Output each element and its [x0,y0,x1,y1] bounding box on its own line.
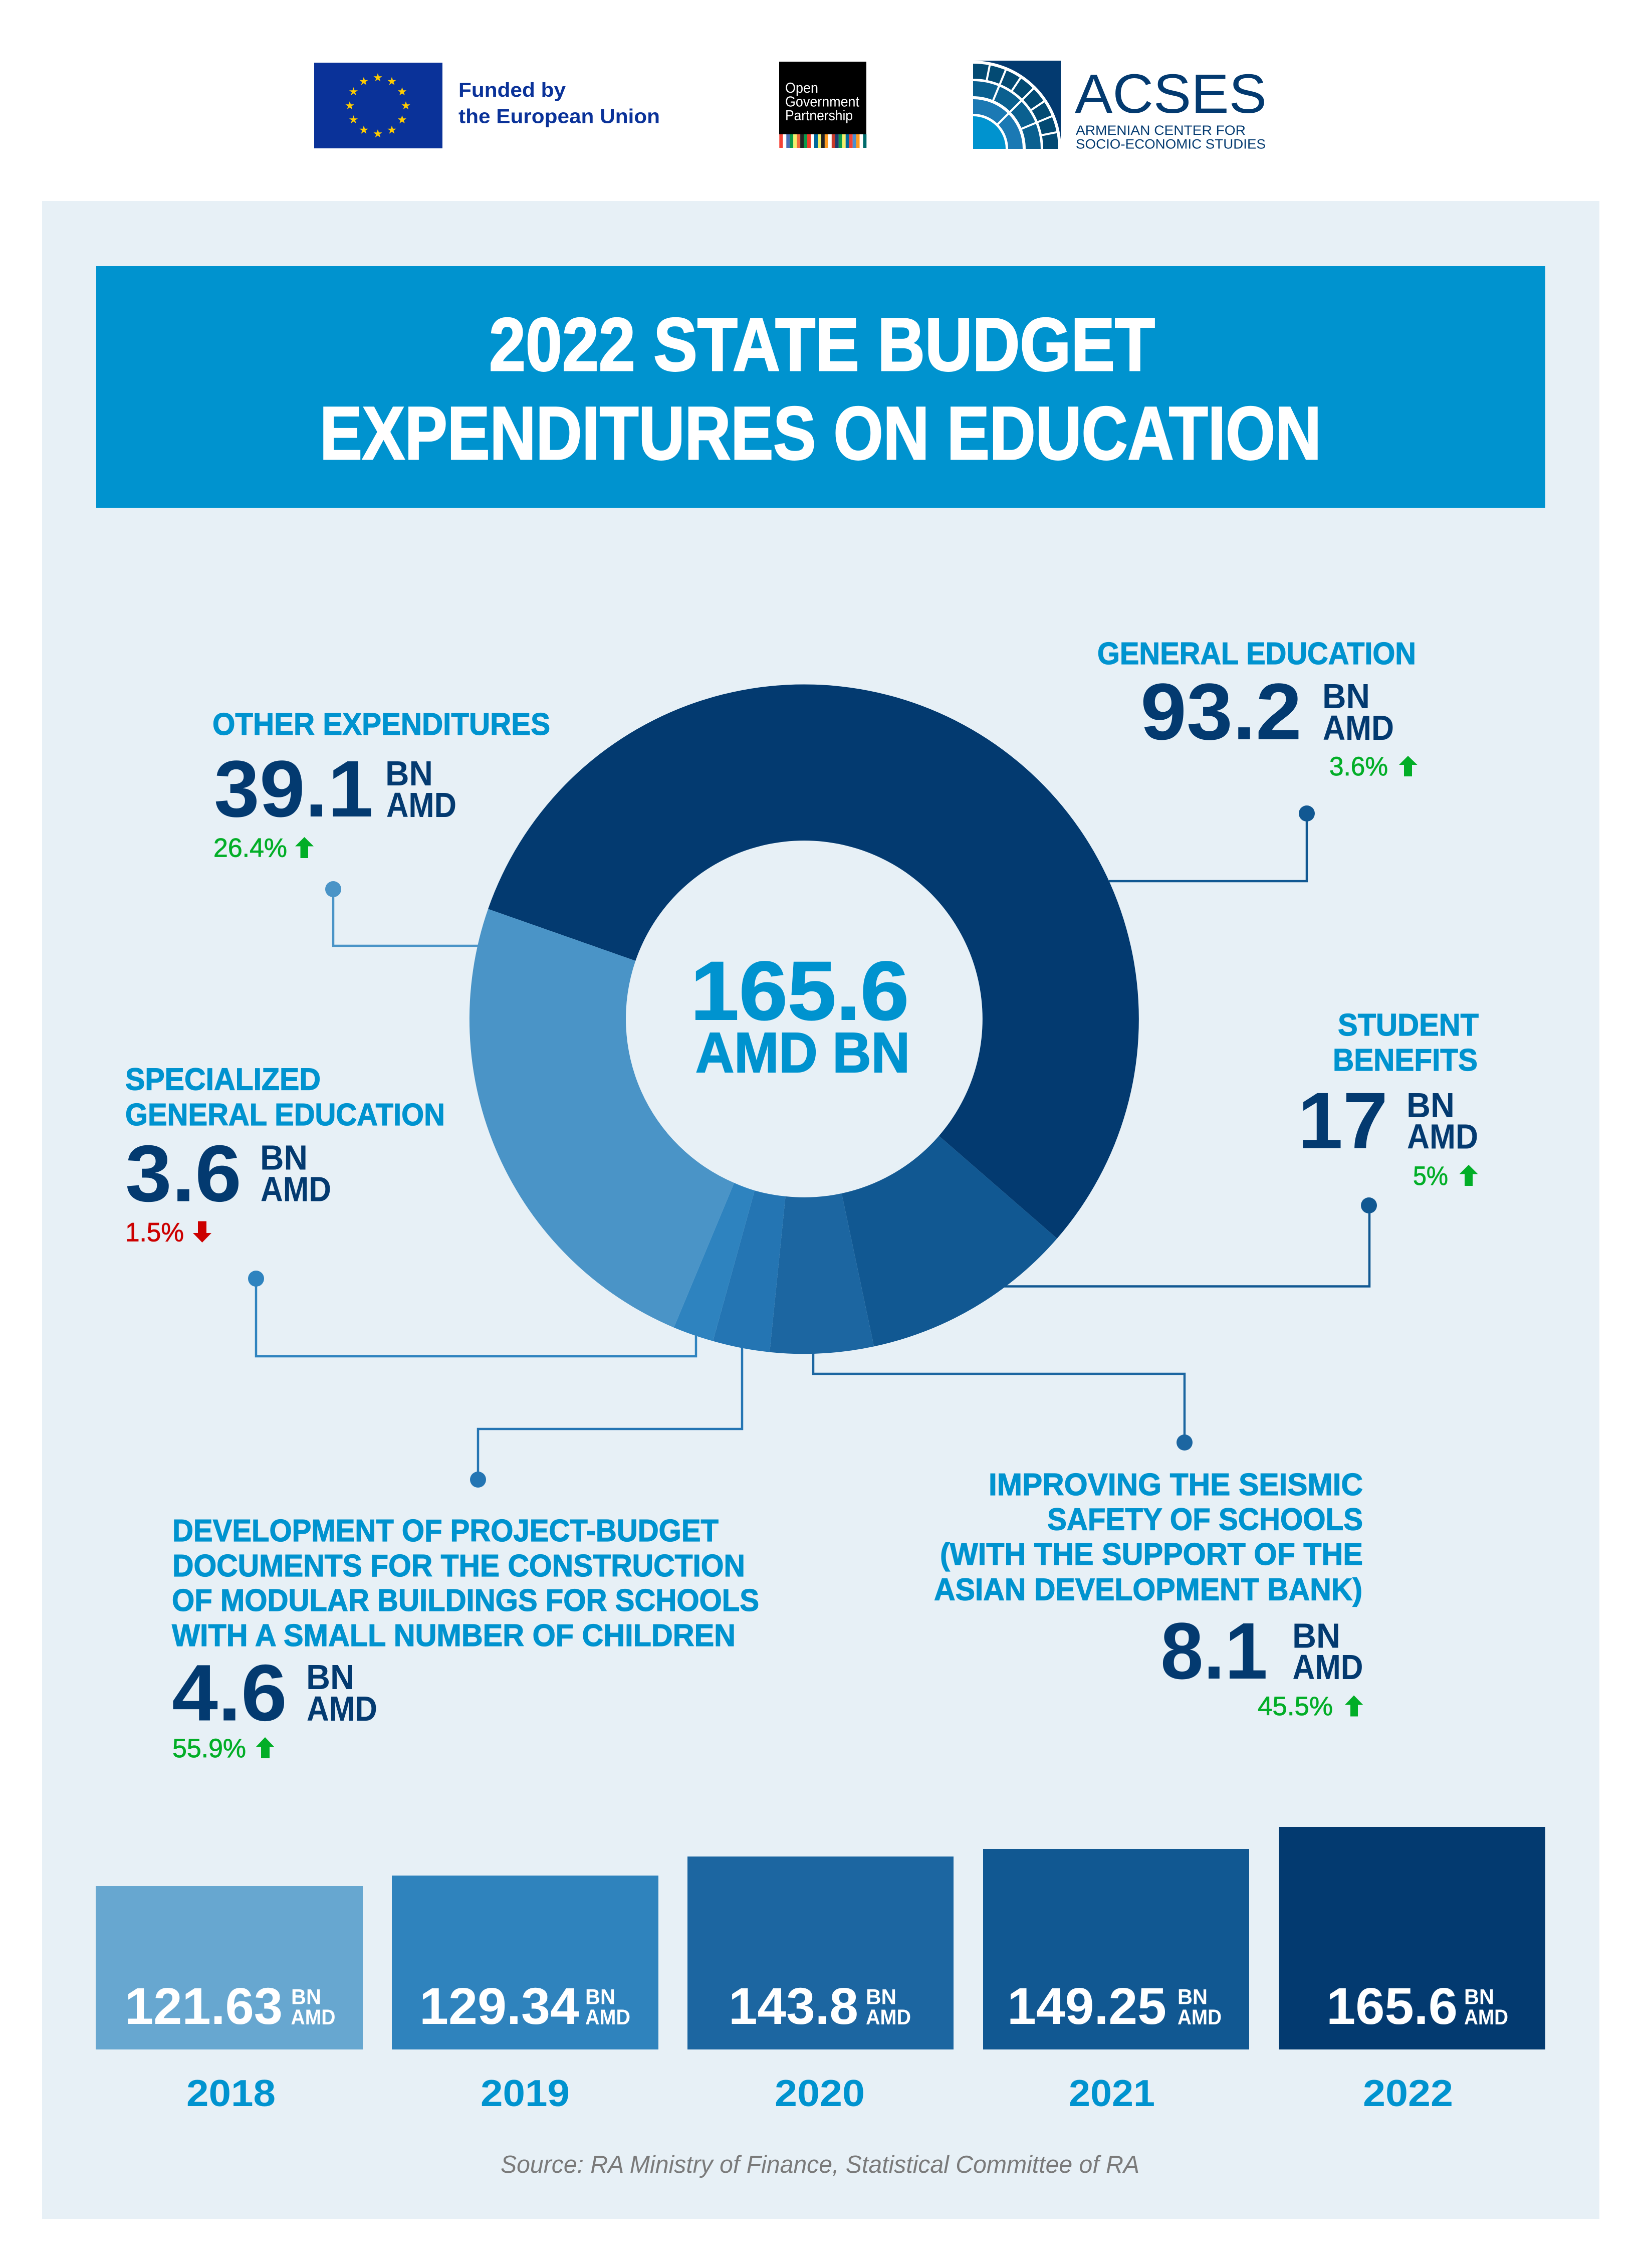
bar: 2020: AMD [866,2005,911,2029]
bar: 2018: 2018 [186,2072,276,2114]
label: student benefits: 5% [1413,1161,1448,1191]
label: improving seismic safety of schools: SAFETY OF SCHOOLS [1047,1503,1363,1537]
icon: up arrow [1345,1695,1363,1716]
bar: 2019: AMD [585,2005,630,2029]
label: other expenditures: BN [385,754,433,793]
label: improving seismic safety of schools: (WITH THE SUPPORT OF THE [940,1537,1363,1572]
label: student benefits: AMD [1407,1117,1478,1156]
label: general education: AMD [1323,708,1394,747]
logo: ACSES [973,61,1265,149]
bar: 2022: 165.6 [1326,1977,1458,2035]
label: specialized general education: BN [260,1138,308,1177]
ACSES wordmark: ACSES [1075,63,1267,125]
label: development of project-budget documents: WITH A SMALL NUMBER OF CHILDREN [172,1618,736,1653]
funded by text: Funded by [458,79,566,101]
icon: down arrow [193,1221,211,1243]
segment: general education [488,684,1139,1239]
label: general education: GENERAL EDUCATION [1097,637,1416,671]
label: improving seismic safety of schools: 8.1 [1160,1606,1268,1696]
label: improving seismic safety of schools: AMD [1293,1647,1363,1687]
leader line: other expenditures [325,881,481,946]
bar: 2018: BN [291,1985,321,2009]
label: development of project-budget documents: DOCUMENTS FOR THE CONSTRUCTION [172,1549,745,1583]
bar: 2022 [1279,1827,1545,2114]
label: development of project-budget documents [172,1514,759,1763]
title banner [96,266,1545,508]
bar: 2022: 2022 [1363,2072,1453,2114]
label: other expenditures: OTHER EXPENDITURES [212,707,550,742]
bar: 2020: 143.8 [729,1977,858,2035]
label: improving seismic safety of schools [934,1468,1363,1721]
icon: up arrow [1459,1165,1478,1186]
logo: Open Government Partnership: Open [785,80,818,96]
leader line: student benefits [1002,1197,1377,1286]
ACSES wordmark: ARMENIAN CENTER FOR [1076,123,1246,138]
label: improving seismic safety of schools: ASIAN DEVELOPMENT BANK) [934,1573,1362,1607]
icon: up arrow [256,1737,274,1758]
segment: specialized general education [674,1183,755,1341]
label: improving seismic safety of schools: IMPROVING THE SEISMIC [989,1468,1363,1502]
logo: Open Government Partnership: Partnership [785,108,853,124]
label: development of project-budget documents: AMD [307,1689,377,1728]
label: student benefits: BENEFITS [1333,1043,1478,1078]
segment: seismic safety [770,1193,874,1354]
label: development of project-budget documents: BN [306,1658,354,1697]
donut centre total [690,945,910,1084]
label: specialized general education: 3.6 [125,1129,242,1218]
label: specialized general education: SPECIALIZED [125,1063,321,1097]
bar: 2019: 129.34 [419,1977,579,2035]
bar: 2018: 121.63 [125,1977,283,2035]
bar: 2020 [687,1857,954,2114]
funded by text: the European Union [458,105,660,127]
label: development of project-budget documents: 4.6 [172,1648,287,1737]
bar: 2021: AMD [1178,2005,1222,2029]
leader line: improving seismic safety [813,1348,1193,1451]
label: general education [1097,637,1418,781]
bar: 2020: BN [866,1985,896,2009]
title banner: 2022 STATE BUDGET [489,302,1155,386]
donut centre total: AMD BN [695,1021,910,1084]
bar chart: budget by year [96,1827,1545,2114]
icon: EU flag [314,63,442,148]
bar: 2021: 149.25 [1007,1977,1166,2035]
segment: other expenditures [470,909,734,1328]
label: general education: BN [1322,677,1370,716]
title banner: EXPENDITURES ON EDUCATION [320,391,1321,475]
label: improving seismic safety of schools: BN [1292,1616,1340,1655]
icon: ACSES arches [973,61,1061,149]
segment: student benefits [842,1136,1057,1346]
label: specialized general education [125,1063,445,1247]
label: student benefits: 17 [1298,1076,1388,1165]
segment: development documents [713,1190,786,1352]
leader line: general education [1109,805,1315,881]
label: other expenditures: 39.1 [214,744,373,834]
bar: 2019: 2019 [481,2072,570,2114]
logo: Open Government Partnership: Government [785,94,859,110]
logo: EU flag and funded by text [314,63,660,148]
icon: up arrow [295,837,314,858]
bar: 2021 [983,1849,1249,2114]
leader line: development of project-budget documents [470,1343,742,1488]
label: student benefits: STUDENT [1338,1008,1479,1043]
icon: up arrow [1399,756,1418,776]
label: other expenditures: 26.4% [213,833,287,863]
label: general education: 3.6% [1329,752,1388,781]
bar: 2019: BN [585,1985,615,2009]
label: specialized general education: GENERAL EDUCATION [125,1098,445,1132]
ACSES wordmark: SOCIO-ECONOMIC STUDIES [1076,136,1266,151]
label: other expenditures [212,707,550,863]
label: development of project-budget documents: 55.9% [172,1734,246,1763]
label: specialized general education: AMD [261,1170,331,1209]
label: improving seismic safety of schools: 45.5% [1258,1692,1333,1721]
label: student benefits: BN [1406,1086,1455,1125]
logo: Open Government Partnership [779,62,866,148]
label: development of project-budget documents: DEVELOPMENT OF PROJECT-BUDGET [172,1514,719,1548]
label: development of project-budget documents: OF MODULAR BUILDINGS FOR SCHOOLS [172,1583,759,1618]
bar: 2022: AMD [1464,2005,1508,2029]
label: specialized general education: 1.5% [125,1218,184,1247]
donut centre total: 165.6 [690,945,909,1038]
ACSES wordmark [1075,63,1267,151]
donut chart [470,684,1139,1354]
bar: 2020: 2020 [775,2072,865,2114]
bar: 2018: AMD [291,2005,336,2029]
bar: 2019 [392,1876,658,2114]
label: general education: 93.2 [1140,667,1302,756]
funded by text [458,79,660,127]
bar: 2021: 2021 [1069,2072,1155,2114]
bar: 2022: BN [1464,1985,1494,2009]
label: other expenditures: AMD [386,785,456,824]
source note: Source: RA Ministry of Finance, Statistical Committee of RA [501,2151,1139,2178]
label: student benefits [1298,1008,1479,1191]
leader line: specialized general education [248,1271,696,1356]
bar: 2021: BN [1178,1985,1208,2009]
bar: 2018 [96,1886,363,2114]
